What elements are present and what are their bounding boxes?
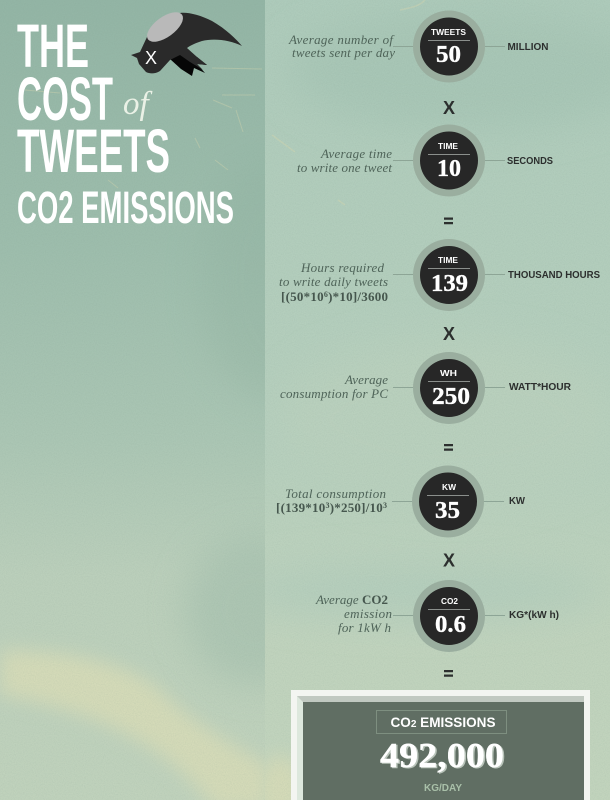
- result panel: [291, 690, 590, 800]
- step: time 139: [279, 239, 600, 311]
- unit: MILLION: [508, 42, 548, 53]
- description: )*250]/10: [330, 500, 383, 515]
- step: tweets 50: 50: [436, 42, 461, 68]
- step: kw 35: 35: [435, 498, 460, 524]
- unit: KG*(kW h): [509, 610, 559, 621]
- operator: equals: [444, 444, 453, 451]
- description: 6: [324, 290, 328, 299]
- left panel: [0, 0, 265, 800]
- description: )*10]/3600: [328, 289, 388, 304]
- result heading: CO2 EMISSIONS: [390, 715, 496, 730]
- unit: THOUSAND HOURS: [508, 270, 600, 281]
- step: time 139: 139: [431, 271, 468, 297]
- title word: of: of: [123, 86, 152, 122]
- step: kw 35: KW: [442, 482, 457, 492]
- step: time 10: [297, 124, 553, 196]
- operator: equals: [444, 218, 453, 224]
- description: to write one tweet: [297, 160, 392, 175]
- unit: WATT*HOUR: [509, 382, 572, 393]
- icon: dead twitter bird: X: [145, 48, 157, 68]
- scratches: [25, 0, 425, 205]
- step: kw 35: [276, 466, 526, 538]
- description: Total consumption: [285, 486, 386, 501]
- description: Hours required: [300, 260, 384, 275]
- operator: equals: [444, 670, 453, 677]
- result value: 492,000: [382, 737, 506, 776]
- result unit: KG/DAY: [424, 782, 462, 794]
- description: Average number of: [288, 32, 395, 47]
- step: tweets 50: [288, 10, 548, 82]
- title: THE: [17, 12, 89, 80]
- description: [315, 592, 392, 635]
- description: for 1kW h: [338, 620, 391, 635]
- description: to write daily tweets: [279, 274, 388, 289]
- description: 3: [325, 501, 329, 510]
- description: Average CO2: [315, 592, 388, 607]
- subtitle: CO2 EMISSIONS: [17, 182, 234, 233]
- step: wh 250: 250: [432, 384, 470, 410]
- description: 3: [383, 501, 387, 510]
- description: Average: [344, 372, 388, 387]
- step: co2 0.6: [315, 580, 559, 652]
- description: [280, 372, 388, 401]
- description: [(50*10: [281, 289, 324, 304]
- operator: times: X: [443, 324, 455, 344]
- title: TWEETS: [17, 117, 170, 185]
- step: co2 0.6: 0.6: [435, 612, 466, 638]
- step: time 139: TIME: [438, 255, 458, 265]
- unit: KW: [509, 496, 526, 507]
- description: [297, 146, 392, 175]
- unit: SECONDS: [507, 156, 553, 167]
- icon: dead twitter bird: [131, 7, 242, 76]
- description: emission: [344, 606, 392, 621]
- description: Average time: [320, 146, 392, 161]
- description: tweets sent per day: [292, 45, 395, 60]
- operator: times: X: [443, 550, 455, 570]
- description: [(139*10: [276, 500, 325, 515]
- description: [279, 260, 388, 304]
- operator: times: X: [443, 98, 455, 118]
- step: time 10: TIME: [438, 141, 458, 151]
- step: tweets 50: TWEETS: [431, 27, 466, 37]
- title: [17, 12, 170, 185]
- step: wh 250: WH: [440, 368, 457, 378]
- result heading: [376, 710, 506, 734]
- description: [276, 486, 387, 515]
- step: co2 0.6: CO2: [441, 596, 458, 606]
- step: time 10: 10: [437, 156, 461, 182]
- step: wh 250: [280, 352, 572, 424]
- result value: 492,000: [380, 736, 504, 775]
- description: consumption for PC: [280, 386, 388, 401]
- description: [288, 32, 395, 60]
- title: COST: [17, 65, 113, 133]
